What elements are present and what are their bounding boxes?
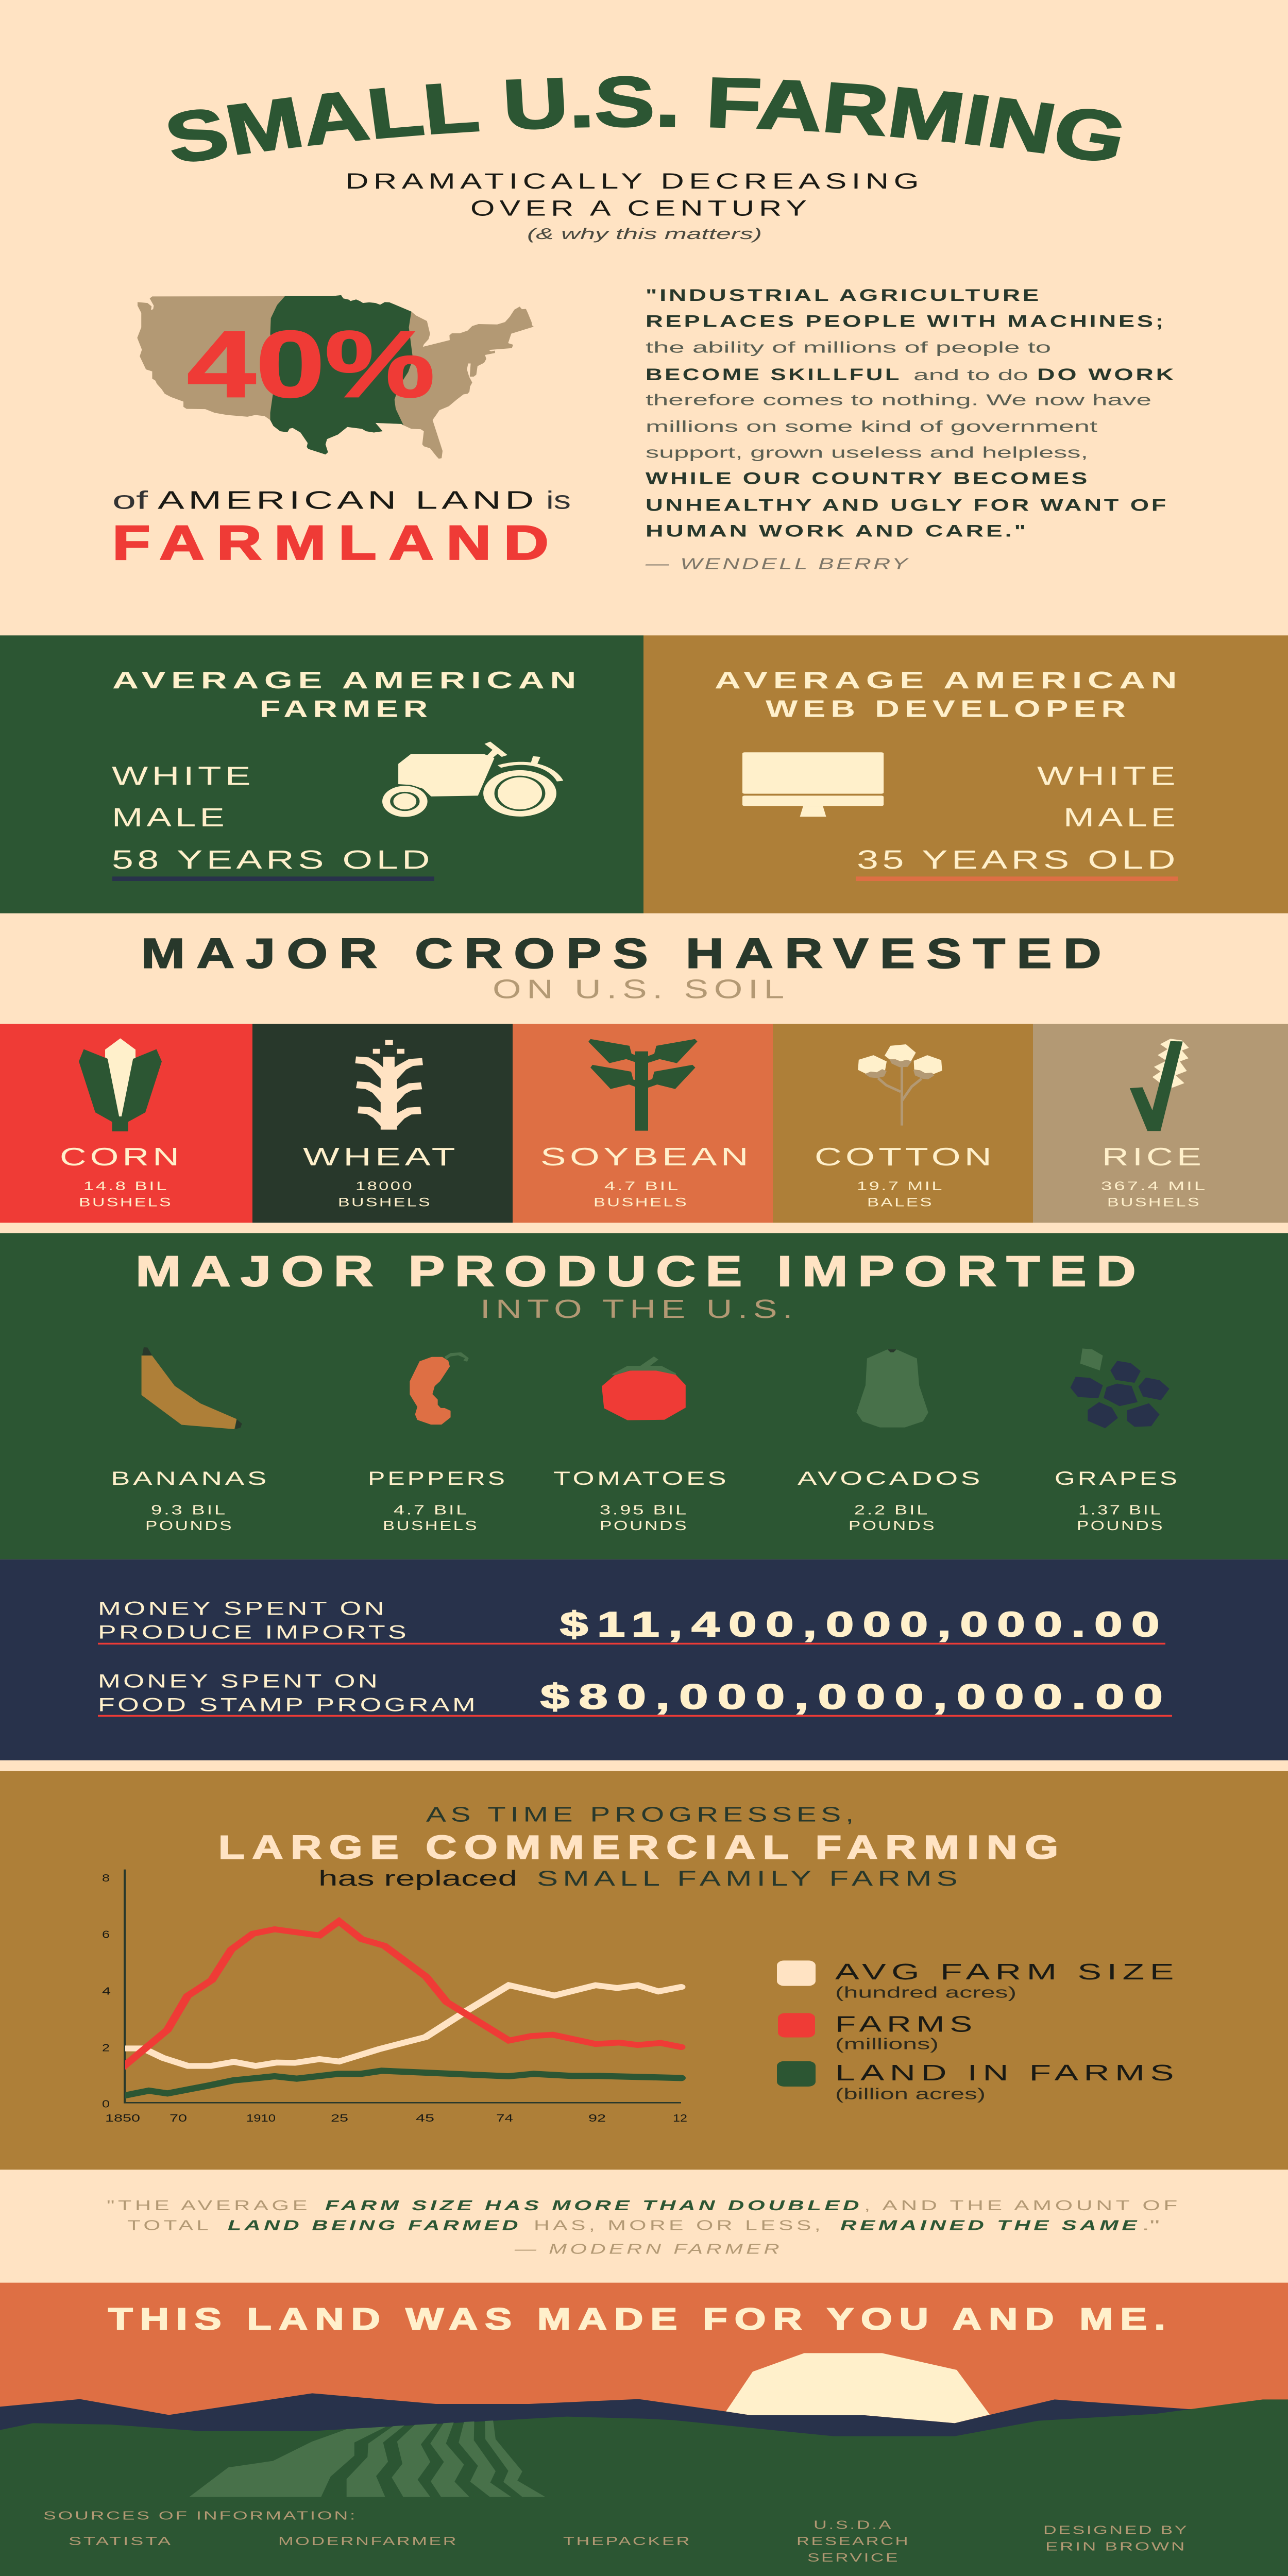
text block: Modern Farmer quote: FARM SIZE HAS MORE THAN DOUBLED bbox=[325, 2197, 862, 2213]
crop: cotton: COTTON bbox=[815, 1143, 995, 1171]
heading: major crops harvested: MAJOR CROPS HARVESTED bbox=[141, 930, 1113, 977]
heading: large commercial farming bbox=[218, 1802, 1066, 1890]
text block: Wendell Berry quote: and to do bbox=[913, 366, 1028, 384]
farmer stats: MALE bbox=[112, 803, 228, 832]
panel: farmland map bbox=[112, 295, 571, 570]
heading: farmer: AVERAGE AMERICAN bbox=[112, 667, 582, 693]
crop: rice: 367.4 MIL bbox=[1101, 1179, 1207, 1193]
sources: THEPACKER bbox=[563, 2535, 691, 2548]
produce: grapes bbox=[1055, 1348, 1180, 1533]
text: of American land is: AMERICAN LAND bbox=[158, 486, 538, 514]
crop: cotton: BALES bbox=[867, 1195, 934, 1209]
farmer stats: 58 YEARS OLD bbox=[112, 845, 434, 874]
legend: land in farms: LAND IN FARMS bbox=[835, 2060, 1179, 2085]
legend: land in farms bbox=[777, 2060, 1179, 2103]
series: average farm size bbox=[116, 1985, 681, 2066]
panel: closing landscape bbox=[0, 2283, 1288, 2576]
credit: DESIGNED BY bbox=[1043, 2523, 1189, 2537]
crop: corn: 14.8 BIL bbox=[83, 1179, 168, 1193]
row: produce imports: PRODUCE IMPORTS bbox=[98, 1622, 409, 1643]
row: produce imports: MONEY SPENT ON bbox=[98, 1598, 387, 1619]
heading: produce bbox=[135, 1247, 1146, 1324]
farmer stats bbox=[112, 761, 434, 881]
subtitle: OVER A CENTURY bbox=[470, 196, 811, 221]
text block: Modern Farmer quote: REMAINED THE SAME bbox=[840, 2217, 1140, 2233]
sources: RESEARCH bbox=[796, 2535, 910, 2548]
text block: Modern Farmer quote: LAND BEING FARMED bbox=[228, 2217, 521, 2233]
legend: average farm size: (hundred acres) bbox=[835, 1984, 1016, 2001]
crop: wheat: BUSHELS bbox=[338, 1195, 432, 1209]
y axis labels: 0 bbox=[102, 2098, 110, 2110]
text: of American land is: of bbox=[112, 486, 148, 514]
y axis labels: 6 bbox=[102, 1929, 110, 1940]
legend: average farm size bbox=[777, 1959, 1179, 2001]
crop: rice bbox=[1033, 1024, 1288, 1223]
x axis labels: 45 bbox=[416, 2113, 434, 2124]
text: of American land is: is bbox=[546, 486, 571, 514]
produce: tomatoes: TOMATOES bbox=[553, 1468, 729, 1489]
heading: produce: MAJOR PRODUCE IMPORTED bbox=[135, 1247, 1146, 1295]
text block: Modern Farmer quote: — MODERN FARMER bbox=[514, 2241, 783, 2257]
credit: ERIN BROWN bbox=[1045, 2540, 1187, 2553]
heading: major crops harvested bbox=[141, 930, 1113, 1004]
produce: tomatoes: 3.95 BIL bbox=[600, 1503, 688, 1518]
subtitle: (& why this matters) bbox=[527, 225, 762, 243]
text block: Modern Farmer quote: "THE AVERAGE bbox=[107, 2197, 311, 2213]
row: produce imports bbox=[98, 1598, 1168, 1645]
panel: major produce imported bbox=[0, 1233, 1288, 1560]
line chart bbox=[102, 1870, 687, 2124]
row: food stamp program: MONEY SPENT ON bbox=[98, 1670, 380, 1692]
crop: rice: BUSHELS bbox=[1107, 1195, 1201, 1209]
text block: Wendell Berry quote: WHILE OUR COUNTRY BECOMES bbox=[646, 469, 1090, 487]
icon: U.S. map bbox=[137, 295, 534, 459]
x axis labels: 1910 bbox=[246, 2113, 276, 2124]
heading: large commercial farming: SMALL FAMILY FARMS bbox=[537, 1867, 962, 1890]
subtitle bbox=[345, 169, 924, 243]
panel: average American web developer bbox=[643, 635, 1288, 913]
produce: avocados bbox=[798, 1349, 983, 1533]
crop: corn: BUSHELS bbox=[79, 1195, 173, 1209]
heading: major crops harvested: ON U.S. SOIL bbox=[493, 974, 790, 1004]
x axis labels: 92 bbox=[588, 2113, 606, 2124]
heading: farmland: FARMLAND bbox=[112, 516, 561, 570]
text block: Wendell Berry quote: support, grown useless and helpless, bbox=[646, 444, 1088, 462]
produce: avocados: AVOCADOS bbox=[798, 1468, 983, 1489]
crop: wheat: WHEAT bbox=[303, 1143, 459, 1171]
legend: farms: (millions) bbox=[835, 2036, 939, 2053]
produce: peppers: PEPPERS bbox=[368, 1468, 507, 1489]
sources: SERVICE bbox=[807, 2551, 900, 2564]
legend bbox=[777, 1959, 1179, 2103]
text block: Wendell Berry quote bbox=[645, 286, 1176, 573]
text block: Wendell Berry quote: "INDUSTRIAL AGRICULTURE bbox=[646, 286, 1041, 304]
heading: web developer: WEB DEVELOPER bbox=[766, 695, 1131, 722]
produce: bananas: POUNDS bbox=[145, 1518, 233, 1533]
heading: this land: THIS LAND WAS MADE FOR YOU AND ME. bbox=[108, 2302, 1173, 2336]
developer stats: 35 YEARS OLD bbox=[857, 845, 1179, 874]
produce: grapes: GRAPES bbox=[1055, 1468, 1180, 1489]
crop: soybean: BUSHELS bbox=[594, 1195, 688, 1209]
x axis labels bbox=[105, 2113, 687, 2124]
text block: Modern Farmer quote: TOTAL bbox=[127, 2217, 212, 2233]
panel: money spent bbox=[0, 1560, 1288, 1760]
y axis labels bbox=[102, 1873, 111, 2110]
icon: monitor bbox=[742, 752, 884, 817]
panel: average American farmer bbox=[0, 635, 643, 913]
crop: soybean: 4.7 BIL bbox=[604, 1179, 680, 1193]
text block: Wendell Berry quote: BECOME SKILLFUL bbox=[646, 365, 902, 384]
heading: web developer: AVERAGE AMERICAN bbox=[715, 667, 1182, 693]
crop: rice: RICE bbox=[1102, 1143, 1205, 1171]
sources: U.S.D.A bbox=[814, 2518, 893, 2532]
sources: MODERNFARMER bbox=[278, 2535, 458, 2548]
icon: tractor bbox=[381, 741, 560, 818]
row: food stamp program bbox=[98, 1670, 1172, 1717]
produce: bananas bbox=[111, 1347, 269, 1533]
text block: Modern Farmer quote: , AND THE AMOUNT OF bbox=[864, 2197, 1181, 2213]
panel: header bbox=[168, 76, 1122, 243]
crop: corn: CORN bbox=[60, 1143, 183, 1171]
y axis labels: 2 bbox=[102, 2042, 110, 2054]
heading: large commercial farming: has replaced bbox=[318, 1867, 517, 1890]
field rows bbox=[189, 2420, 545, 2497]
heading: large commercial farming: AS TIME PROGRESSES, bbox=[426, 1802, 858, 1826]
title: SMALL U.S. FARMING bbox=[168, 76, 1122, 162]
y axis labels: 4 bbox=[102, 1986, 111, 1997]
text block: Modern Farmer quote bbox=[107, 2197, 1181, 2257]
series: land in farms bbox=[116, 2071, 681, 2097]
produce: tomatoes: POUNDS bbox=[600, 1518, 688, 1533]
mountains bbox=[0, 2393, 1236, 2446]
crop: corn bbox=[0, 1024, 252, 1223]
text block: Wendell Berry quote: millions on some kind of government bbox=[646, 418, 1097, 435]
text block: Modern Farmer quote: HAS, MORE OR LESS, bbox=[534, 2217, 824, 2233]
produce: bananas: BANANAS bbox=[111, 1468, 269, 1489]
row: food stamp program: $80,000,000,000.00 bbox=[540, 1677, 1172, 1717]
icon: sun bbox=[726, 2353, 990, 2423]
x axis labels: 25 bbox=[331, 2113, 348, 2124]
crop: wheat: 18000 bbox=[355, 1179, 414, 1193]
produce: peppers: 4.7 BIL bbox=[394, 1503, 469, 1518]
x axis labels: 1850 bbox=[105, 2113, 140, 2124]
stat: 40%: 40% bbox=[187, 311, 435, 417]
produce: avocados: POUNDS bbox=[849, 1518, 936, 1533]
panel: crops row bbox=[0, 1024, 1288, 1223]
row: food stamp program: FOOD STAMP PROGRAM bbox=[98, 1694, 478, 1716]
produce: grapes: 1.37 BIL bbox=[1078, 1503, 1162, 1518]
text block: Wendell Berry quote: therefore comes to nothing. We now have bbox=[646, 392, 1151, 409]
crop: cotton bbox=[773, 1024, 1033, 1223]
text block: Wendell Berry quote: HUMAN WORK AND CARE." bbox=[646, 521, 1028, 540]
row: produce imports: $11,400,000,000.00 bbox=[560, 1605, 1168, 1644]
chart axes bbox=[125, 1870, 681, 2103]
legend: average farm size: AVG FARM SIZE bbox=[835, 1959, 1179, 1984]
heading: produce: INTO THE U.S. bbox=[480, 1295, 798, 1324]
crop: cotton: 19.7 MIL bbox=[857, 1179, 944, 1193]
text block: Wendell Berry quote: REPLACES PEOPLE WITH MACHINES; bbox=[646, 312, 1166, 331]
crop: soybean: SOYBEAN bbox=[540, 1143, 752, 1171]
text block: Wendell Berry quote: DO WORK bbox=[1037, 365, 1176, 384]
sources: STATISTA bbox=[69, 2535, 173, 2548]
produce: bananas: 9.3 BIL bbox=[151, 1503, 227, 1518]
series: farms bbox=[116, 1921, 681, 2073]
produce: tomatoes bbox=[553, 1357, 729, 1533]
hills bbox=[0, 2399, 1288, 2576]
credit bbox=[1043, 2523, 1189, 2553]
text block: Wendell Berry quote: UNHEALTHY AND UGLY FOR WANT OF bbox=[646, 496, 1168, 514]
x axis labels: 70 bbox=[170, 2113, 187, 2124]
crop: soybean bbox=[513, 1024, 773, 1223]
heading: farmer bbox=[112, 667, 582, 722]
heading: web developer bbox=[715, 667, 1182, 722]
developer stats: MALE bbox=[1063, 803, 1179, 832]
produce: peppers: BUSHELS bbox=[383, 1518, 479, 1533]
y axis labels: 8 bbox=[102, 1873, 110, 1884]
legend: farms: FARMS bbox=[835, 2011, 977, 2037]
x axis labels: 12 bbox=[673, 2113, 687, 2124]
produce: avocados: 2.2 BIL bbox=[854, 1503, 929, 1518]
text block: Wendell Berry quote: the ability of millions of people to bbox=[646, 339, 1051, 357]
text block: Wendell Berry quote: — WENDELL BERRY bbox=[645, 555, 910, 573]
developer stats: WHITE bbox=[1037, 761, 1179, 790]
sources bbox=[43, 2509, 910, 2564]
legend: farms bbox=[778, 2011, 977, 2053]
produce: grapes: POUNDS bbox=[1077, 1518, 1164, 1533]
developer stats bbox=[856, 761, 1179, 881]
x axis labels: 74 bbox=[496, 2113, 513, 2124]
text block: Modern Farmer quote: ." bbox=[1142, 2217, 1160, 2233]
legend: land in farms: (billion acres) bbox=[835, 2086, 986, 2103]
sources: SOURCES OF INFORMATION: bbox=[43, 2509, 357, 2522]
heading: large commercial farming: LARGE COMMERCIAL FARMING bbox=[218, 1829, 1066, 1866]
crop: wheat bbox=[252, 1024, 513, 1223]
heading: farmer: FARMER bbox=[260, 695, 433, 722]
subtitle: DRAMATICALLY DECREASING bbox=[345, 169, 924, 193]
produce: peppers bbox=[368, 1352, 507, 1533]
panel: commercial farming bbox=[0, 1771, 1288, 2170]
farmer stats: WHITE bbox=[112, 761, 255, 790]
